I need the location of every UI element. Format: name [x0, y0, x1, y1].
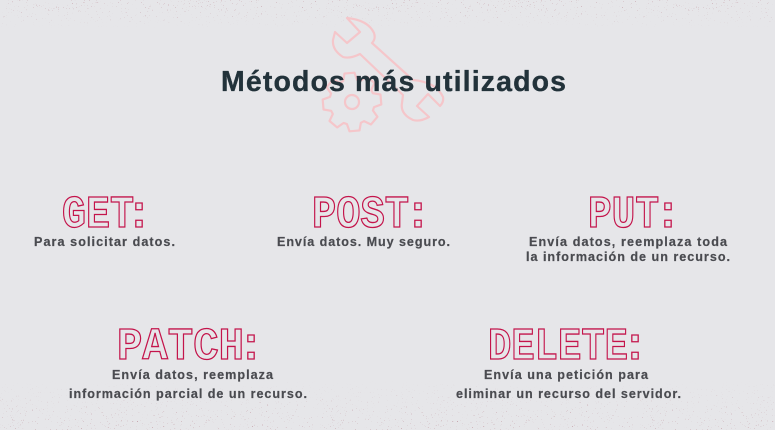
method: PUT — [526, 190, 730, 264]
method: GET — [34, 190, 175, 249]
heading: PUT: : — [654, 190, 682, 241]
heading: PUT: PUT — [588, 190, 659, 241]
description: PATCH — [69, 368, 307, 401]
description: PUT: Envía datos, reemplaza toda — [529, 235, 728, 249]
heading: DELETE: DELETE — [488, 322, 628, 373]
method: PATCH — [69, 322, 307, 401]
description: GET: Para solicitar datos. — [34, 235, 175, 249]
heading: POST: POST — [312, 190, 409, 241]
description: DELETE: Envía una petición para — [484, 368, 649, 382]
description: DELETE — [456, 368, 681, 401]
heading: DELETE: : — [622, 322, 649, 373]
method: POST — [277, 190, 450, 249]
description: PATCH: información parcial de un recurso. — [69, 387, 307, 401]
icon: wrench — [333, 18, 443, 121]
description: PUT: la información de un recurso. — [526, 250, 730, 264]
heading: GET: : — [126, 190, 153, 241]
title: Métodos más utilizados — [221, 66, 566, 98]
description: PUT — [526, 235, 730, 264]
heading: PATCH: : — [238, 322, 265, 373]
icon: gear — [321, 71, 383, 133]
heading: POST: : — [404, 190, 432, 241]
heading: PATCH: PATCH — [117, 322, 244, 373]
description: PATCH: Envía datos, reemplaza — [112, 368, 274, 382]
description: DELETE: eliminar un recurso del servidor. — [456, 387, 681, 401]
description: POST: Envía datos. Muy seguro. — [277, 235, 450, 249]
icon: wrench and gear — [321, 18, 443, 133]
method: DELETE — [456, 322, 681, 401]
heading: GET: GET — [62, 190, 134, 241]
